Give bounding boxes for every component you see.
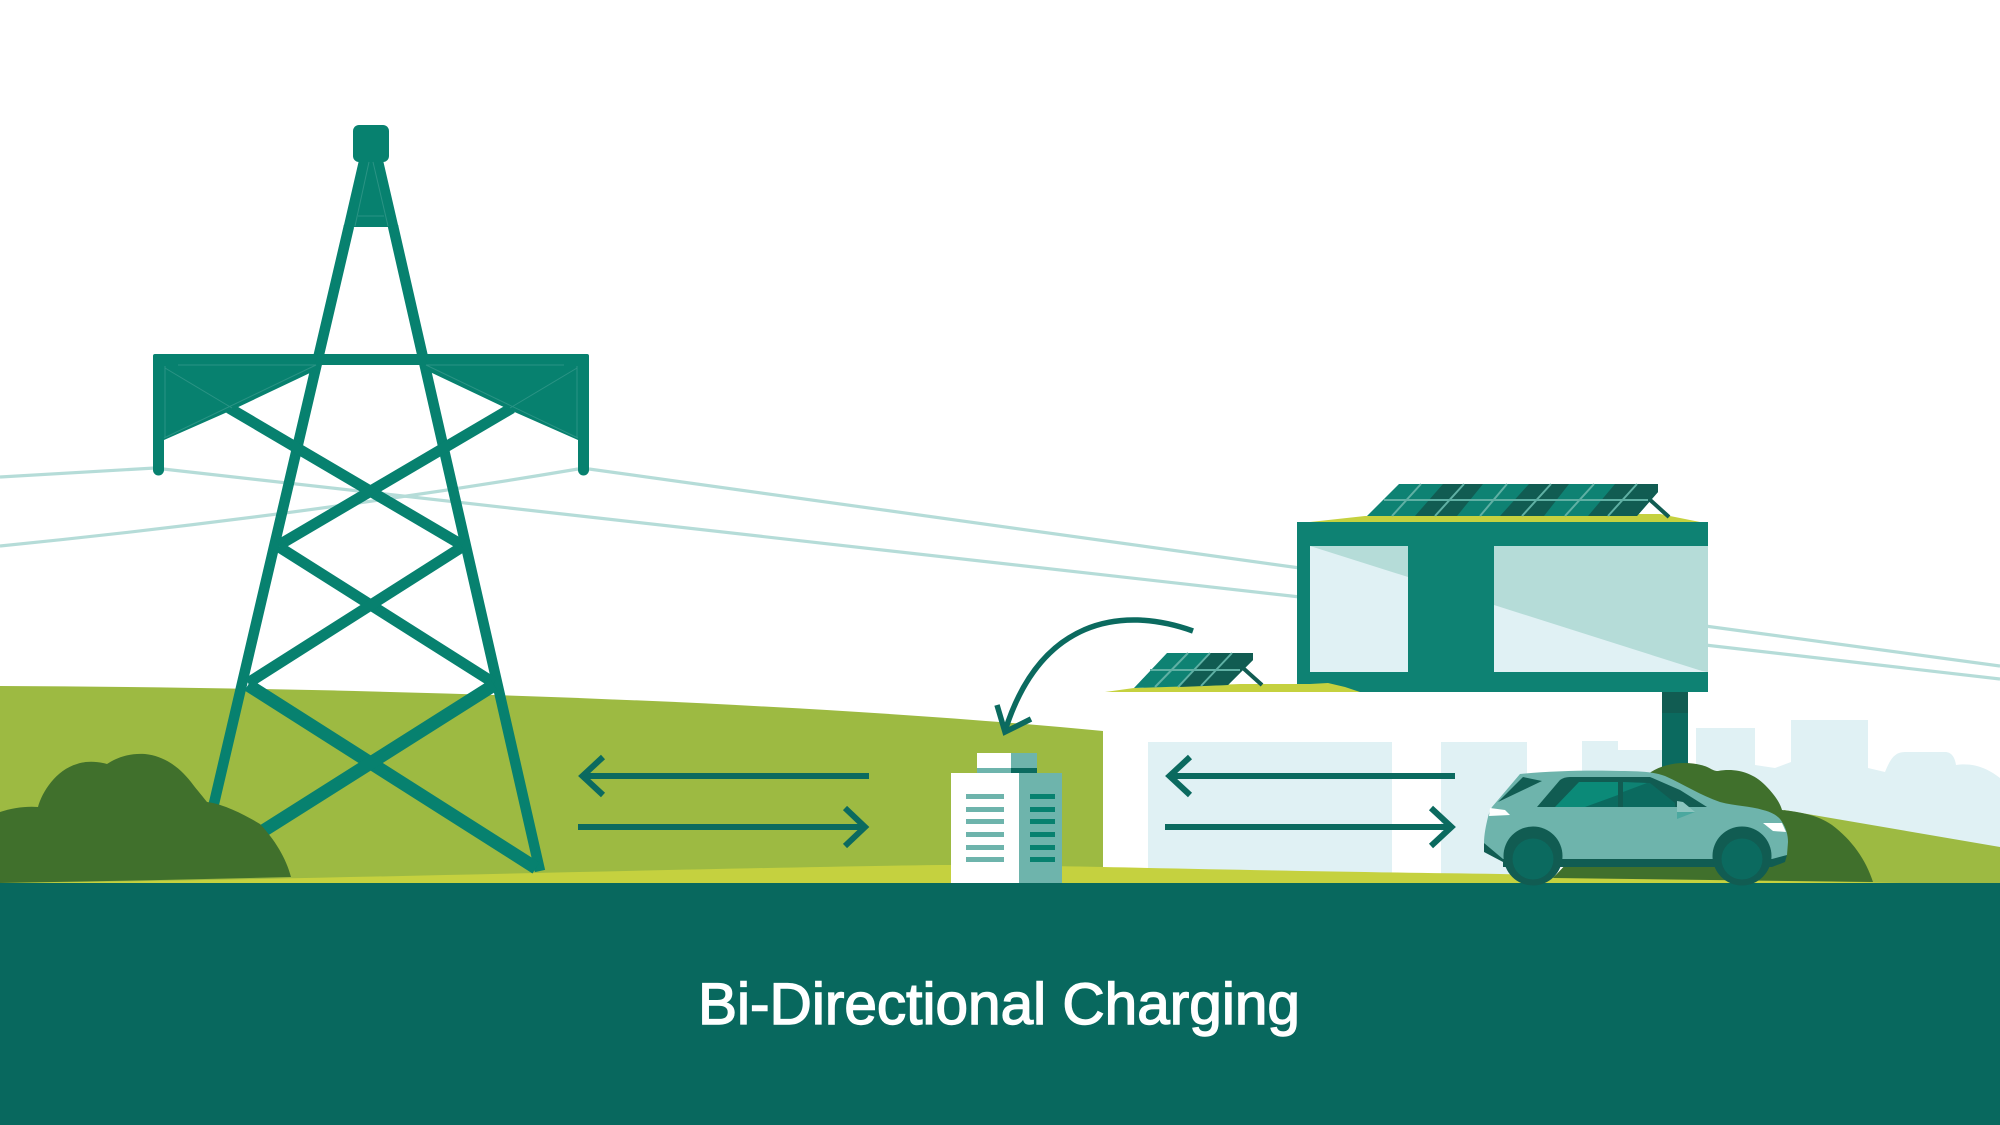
small panel grid lines (1150, 653, 1240, 687)
car body (1484, 771, 1788, 859)
office building (951, 753, 1062, 883)
building roof block (977, 753, 1037, 773)
car underbody (1484, 843, 1787, 867)
garage window right (1441, 742, 1527, 876)
right green hill (1784, 810, 2000, 883)
pole under house (1662, 692, 1688, 773)
house window left (1310, 546, 1408, 672)
arrow: car to house (1170, 757, 1455, 795)
pylon crossarm (153, 354, 589, 476)
small panel cells (1134, 653, 1253, 688)
car rear wheel (1504, 826, 1562, 886)
dark footer band (0, 883, 2000, 1125)
roof panel grid lines (1384, 484, 1648, 516)
roof panel support (1648, 498, 1669, 517)
roof grass (1310, 514, 1700, 522)
car rear glass (1623, 782, 1675, 807)
power lines (0, 468, 2000, 679)
car front light (1763, 823, 1786, 832)
garage window left (1148, 742, 1392, 876)
car front wheel (1712, 826, 1772, 886)
car mirror (1677, 801, 1695, 819)
arrow: grid to building (578, 808, 865, 846)
building window stripes (966, 794, 1055, 862)
car rear window (1498, 777, 1542, 802)
small solar panel (1105, 653, 1360, 692)
car front glass (1555, 782, 1618, 807)
curved arrow: solar to building (997, 620, 1193, 732)
roof solar panel (1367, 484, 1669, 517)
lawn under small panel (1105, 683, 1360, 692)
electricity pylon (153, 125, 589, 871)
car rear light (1489, 808, 1510, 816)
ground strip (0, 865, 1900, 883)
pylon thin highlight lines (164, 162, 578, 438)
pylon top cap (353, 125, 389, 162)
house window right (1494, 546, 1708, 672)
car window frame (1537, 777, 1707, 807)
title: Bi-Directional Charging (698, 972, 1300, 1037)
bush left (0, 754, 291, 883)
distant city skyline (1582, 720, 2000, 860)
left green hill (0, 686, 1103, 883)
pylon peak (344, 160, 398, 227)
bush behind car (1553, 763, 1873, 882)
building body (951, 773, 1062, 883)
pylon lattice (212, 226, 540, 871)
small panel support (1243, 668, 1262, 685)
arrow: house to car (1165, 808, 1452, 846)
roof panel cells (1367, 484, 1658, 516)
arrow: building to grid (582, 757, 869, 795)
electric car (1484, 771, 1788, 886)
upper house box (1297, 522, 1708, 692)
